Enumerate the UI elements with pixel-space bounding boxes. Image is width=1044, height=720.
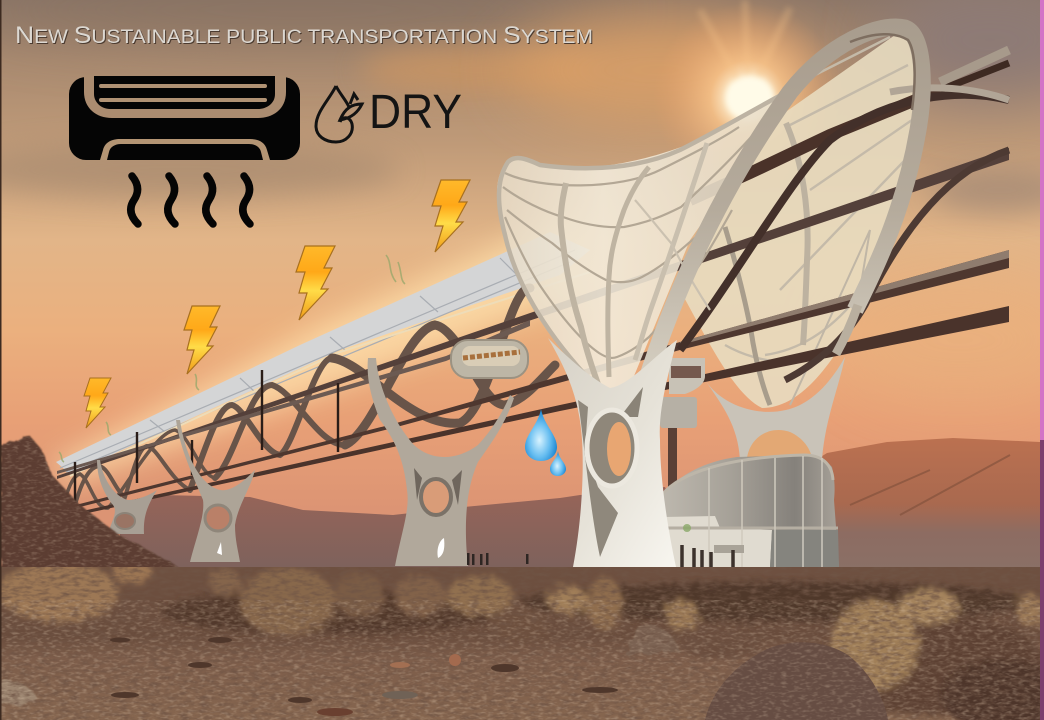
third pier	[368, 358, 514, 566]
desert shrubs	[0, 560, 1044, 720]
foreground small rocks	[0, 626, 680, 705]
vertical hangers	[75, 370, 338, 503]
front membrane	[497, 85, 800, 410]
icon: lightning bolt 4	[84, 378, 111, 428]
desert ground	[0, 567, 1044, 720]
second pier	[176, 420, 255, 562]
icon: leaves	[59, 255, 405, 462]
icon: dry mode	[316, 86, 462, 142]
label: DRY: DRY	[369, 86, 462, 139]
back membrane and tower	[680, 28, 922, 460]
transit pod	[451, 340, 528, 378]
foreground boulder	[705, 642, 888, 720]
big arc and hoop	[645, 27, 922, 385]
ground texture	[0, 567, 1044, 720]
left rocky hill	[2, 434, 178, 567]
sun	[653, 0, 843, 193]
icon: lightning bolt 3	[184, 306, 220, 374]
icon: lightning bolt 2	[296, 246, 335, 320]
icon: lightning bolt 1	[432, 180, 470, 252]
solar panel deck	[56, 232, 590, 476]
truss waves	[62, 288, 555, 508]
station building	[662, 455, 839, 568]
icon: water drops	[525, 409, 566, 476]
distant mountains	[120, 438, 1040, 570]
icon: air conditioner	[69, 76, 300, 224]
icon: airflow waves	[131, 176, 250, 224]
people at pier	[467, 553, 528, 565]
main tower	[548, 338, 677, 567]
observation platform	[660, 358, 705, 488]
title: NEW SUSTAINABLE PUBLIC TRANSPORTATION SYSTEM	[15, 22, 593, 49]
pod rails and chords	[57, 50, 1009, 519]
pebbles	[110, 637, 618, 716]
small pier	[97, 460, 157, 534]
